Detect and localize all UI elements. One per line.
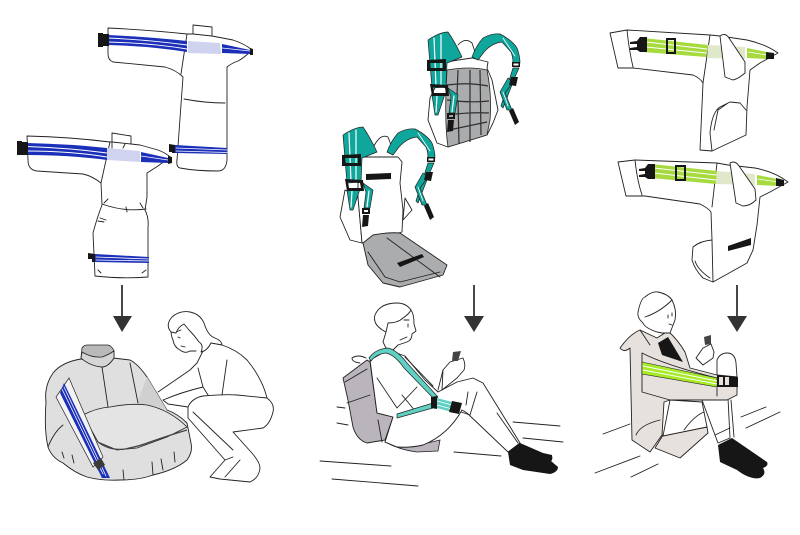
seated person in hoodie	[620, 292, 768, 478]
panel: hoodie column	[595, 30, 788, 478]
bean bag chair	[45, 345, 192, 480]
black bar on pad	[397, 254, 424, 267]
jacket folded, lower	[17, 133, 172, 278]
grey pad	[363, 233, 447, 287]
backpack, back panel view	[427, 32, 520, 147]
black bar on backpack	[366, 173, 391, 180]
straps	[342, 127, 435, 227]
arrow	[464, 285, 484, 332]
backpack, front view	[340, 127, 447, 287]
jacket folded, upper	[98, 25, 253, 171]
hoodie jacket, opened view	[618, 160, 788, 282]
arrow	[113, 285, 132, 332]
panel: jacket column	[17, 25, 273, 482]
arrow	[727, 285, 747, 332]
ground lines	[320, 407, 563, 486]
ground lines	[595, 407, 780, 477]
panel: backpack column	[320, 32, 563, 486]
seated person with backpack	[343, 303, 558, 474]
hoodie jacket, pocket view	[610, 30, 778, 151]
crouching woman	[158, 312, 273, 482]
straps	[427, 32, 520, 132]
black bar	[728, 238, 751, 251]
